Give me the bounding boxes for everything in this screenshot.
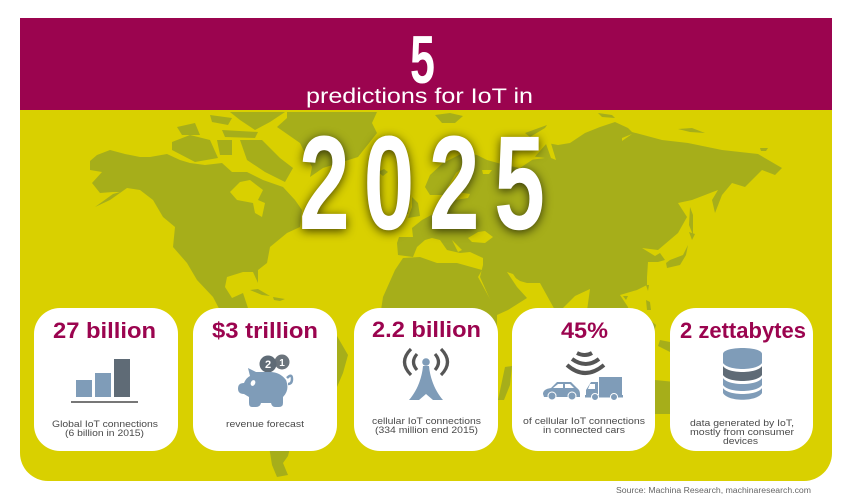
heading: 2.2 billion [372,317,481,342]
heading: $3 trillion [212,318,318,343]
heading: 27 billion [53,318,156,343]
description: (334 million end 2015) [375,425,478,436]
Greenland [277,112,377,177]
title number 5: 5 [410,23,435,98]
Eurasia [397,122,782,325]
British Isles [402,197,420,218]
icon: database [723,348,762,400]
card: 2 zettabytes [670,308,813,451]
inland seas on map [230,134,632,287]
North America [90,150,302,320]
description [690,418,794,447]
description: cellular IoT connections [372,416,481,427]
heading: 2 zettabytes [680,318,806,343]
description [372,416,481,436]
description: in connected cars [543,425,625,436]
Arctic Eurasian islands [435,113,768,151]
description [52,419,158,439]
South America [268,320,348,477]
icon: truck [585,377,623,400]
card: 27 billion [34,308,178,451]
icon: cell tower [404,349,448,400]
title line: predictions for IoT in [306,84,533,108]
description [523,416,645,436]
Japan and Pacific islands [623,207,695,352]
card: 2.2 billion [354,308,498,451]
world map [90,112,782,477]
card: 45% [512,308,655,451]
icon: bar chart [71,359,138,403]
icon: signal waves [567,353,604,373]
source note: Source: Machina Research, machinaresearch.com [616,486,811,495]
Madagascar [498,366,512,400]
Canadian Arctic islands [172,112,293,182]
Australia [640,380,675,414]
description: Global IoT connections [52,419,158,430]
icon: piggy bank: 1 [279,358,285,369]
card: 3 trillion [193,308,337,451]
Caribbean islands [250,289,285,301]
Africa [378,257,497,330]
description: mostly from consumer [690,427,794,438]
description: data generated by IoT, [690,418,794,429]
icon: piggy bank [238,354,292,407]
description: devices [723,436,758,447]
description: of cellular IoT connections [523,416,645,427]
Iceland [378,169,388,176]
top banner [20,18,832,110]
icon: piggy bank: 2 [265,359,271,371]
description: (6 billion in 2015) [65,428,144,439]
heading: 45% [561,318,608,343]
icon: car [543,382,580,400]
big year 2025: 2025 [299,109,545,258]
description: revenue forecast [226,419,304,430]
